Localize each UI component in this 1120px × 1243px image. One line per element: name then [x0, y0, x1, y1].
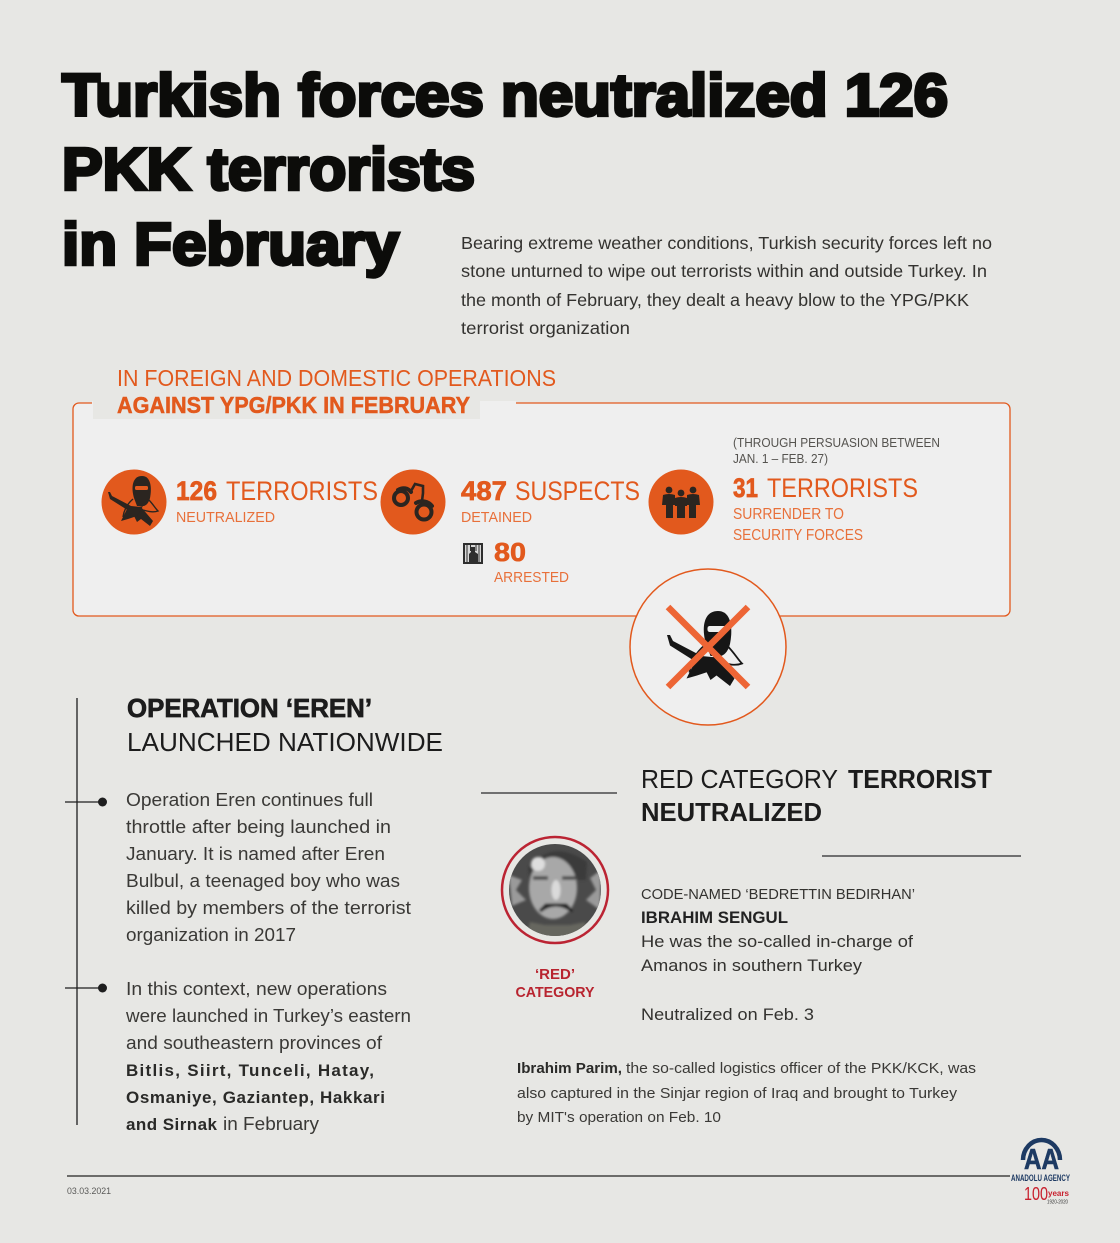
- text block: Operation Eren description: January. It is named after Eren: [126, 844, 385, 864]
- label: red category: [516, 966, 594, 1001]
- text block: Ibrahim Parim capture: [517, 1060, 976, 1126]
- label: red category: CATEGORY: [516, 984, 594, 1001]
- heading: Operation Eren: OPERATION ‘EREN’: [127, 693, 372, 723]
- logo: Anadolu Agency: AA: [1024, 1144, 1059, 1176]
- icon: prisoner behind bars: [463, 543, 483, 564]
- text block: new operations provinces: In this context, new operations: [126, 979, 387, 999]
- logo: Anadolu Agency: 1920-2020: [1047, 1200, 1068, 1206]
- title: PKK terrorists: [62, 136, 475, 202]
- stat: 80 arrested: 80: [494, 537, 526, 567]
- stat: 126 terrorists neutralized: [176, 476, 378, 526]
- stat: 80 arrested: [494, 537, 569, 586]
- text block: Ibrahim Sengul profile: [641, 886, 915, 1024]
- text block: new operations provinces: Bitlis, Siirt, Tunceli, Hatay,: [126, 1061, 374, 1080]
- icon: three people in orange circle: [648, 470, 714, 534]
- text block: new operations provinces: were launched in Turkey’s eastern: [125, 1006, 411, 1026]
- intro text block: terrorist organization: [461, 318, 630, 338]
- text block: Ibrahim Parim capture: by MIT's operation on Feb. 10: [517, 1109, 721, 1126]
- text block: Ibrahim Parim capture: also captured in the Sinjar region of Iraq and brought to Turkey: [517, 1085, 958, 1102]
- heading: Operation Eren: [127, 693, 443, 757]
- panel: February operations: [73, 396, 1010, 616]
- text block: new operations provinces: [125, 979, 411, 1134]
- icon: masked gunman in orange circle: [102, 470, 166, 534]
- text block: new operations provinces: and southeastern provinces of: [126, 1033, 383, 1053]
- heading: red category terrorist: TERRORIST: [848, 764, 992, 794]
- text block: Ibrahim Parim capture: the so-called logistics officer of the PKK/KCK, was: [626, 1060, 976, 1077]
- timeline: [65, 698, 107, 1125]
- stat: 487 suspects detained: DETAINED: [461, 509, 532, 526]
- panel heading: IN FOREIGN AND DOMESTIC OPERATIONS: [117, 365, 556, 391]
- icon: handcuffs in orange circle: [380, 470, 446, 534]
- panel heading: [117, 365, 556, 418]
- stat: 31 terrorists surrender: (THROUGH PERSUASION BETWEEN: [733, 435, 940, 450]
- logo: Anadolu Agency: ANADOLU AGENCY: [1011, 1173, 1070, 1183]
- intro text block: stone unturned to wipe out terrorists within and outside Turkey. In: [461, 261, 987, 281]
- stat: 31 terrorists surrender: 31: [733, 473, 758, 503]
- title: in February: [62, 212, 399, 278]
- intro text block: the month of February, they dealt a heavy blow to the YPG/PKK: [461, 290, 969, 310]
- stat: 126 terrorists neutralized: 126: [176, 476, 217, 506]
- title: [62, 62, 948, 278]
- text block: Operation Eren description: Operation Eren continues full: [126, 790, 373, 810]
- text block: Operation Eren description: organization in 2017: [126, 925, 296, 945]
- stat: 126 terrorists neutralized: TERRORISTS: [226, 476, 378, 506]
- stat: 126 terrorists neutralized: NEUTRALIZED: [176, 509, 275, 526]
- text block: new operations provinces: in February: [223, 1114, 319, 1134]
- text block: Ibrahim Sengul profile: He was the so-called in-charge of: [641, 932, 913, 951]
- stat: 487 suspects detained: [461, 476, 640, 526]
- text block: new operations provinces: Osmaniye, Gaziantep, Hakkari: [126, 1088, 385, 1107]
- heading: red category terrorist: RED CATEGORY: [641, 764, 838, 794]
- logo: Anadolu Agency: years: [1048, 1189, 1070, 1198]
- intro text block: Bearing extreme weather conditions, Turkish security forces left no: [461, 233, 992, 253]
- stat: 31 terrorists surrender: JAN. 1 – FEB. 27): [733, 451, 828, 466]
- stat: 31 terrorists surrender: SURRENDER TO: [733, 506, 844, 523]
- text block: Ibrahim Parim capture: Ibrahim Parim,: [517, 1060, 622, 1077]
- text block: Ibrahim Sengul profile: IBRAHIM SENGUL: [641, 908, 788, 927]
- logo: Anadolu Agency: [1011, 1140, 1070, 1206]
- stat: 80 arrested: ARRESTED: [494, 569, 569, 586]
- text block: Operation Eren description: Bulbul, a teenaged boy who was: [126, 871, 400, 891]
- text block: Operation Eren description: throttle after being launched in: [126, 817, 391, 837]
- label: red category: ‘RED’: [535, 966, 575, 983]
- text block: Ibrahim Sengul profile: Amanos in southern Turkey: [641, 956, 863, 975]
- text block: Ibrahim Sengul profile: CODE-NAMED ‘BEDRETTIN BEDIRHAN’: [641, 886, 915, 903]
- stat: 31 terrorists surrender: TERRORISTS: [767, 473, 918, 503]
- title: Turkish forces neutralized 126: [62, 62, 948, 128]
- intro text block: [461, 233, 992, 338]
- logo: Anadolu Agency: 100: [1024, 1184, 1048, 1204]
- stat: 487 suspects detained: 487: [461, 476, 507, 506]
- text block: Operation Eren description: killed by members of the terrorist: [126, 898, 411, 918]
- heading: red category terrorist: [481, 764, 1021, 856]
- text block: Operation Eren description: [126, 790, 411, 945]
- stat: 31 terrorists surrender: SECURITY FORCES: [733, 527, 863, 544]
- heading: red category terrorist: NEUTRALIZED: [641, 797, 822, 827]
- heading: Operation Eren: LAUNCHED NATIONWIDE: [127, 727, 443, 757]
- stat: 31 terrorists surrender: [733, 435, 940, 544]
- panel heading: AGAINST YPG/PKK IN FEBRUARY: [117, 392, 470, 418]
- text block: new operations provinces: and Sirnak: [126, 1115, 218, 1134]
- footer rule and date: 03.03.2021: [67, 1186, 111, 1197]
- icon: crossed-out gunman badge: [630, 569, 786, 725]
- text block: Ibrahim Sengul profile: Neutralized on Feb. 3: [641, 1005, 814, 1024]
- photo: Ibrahim Sengul: [502, 837, 608, 943]
- stat: 487 suspects detained: SUSPECTS: [515, 476, 640, 506]
